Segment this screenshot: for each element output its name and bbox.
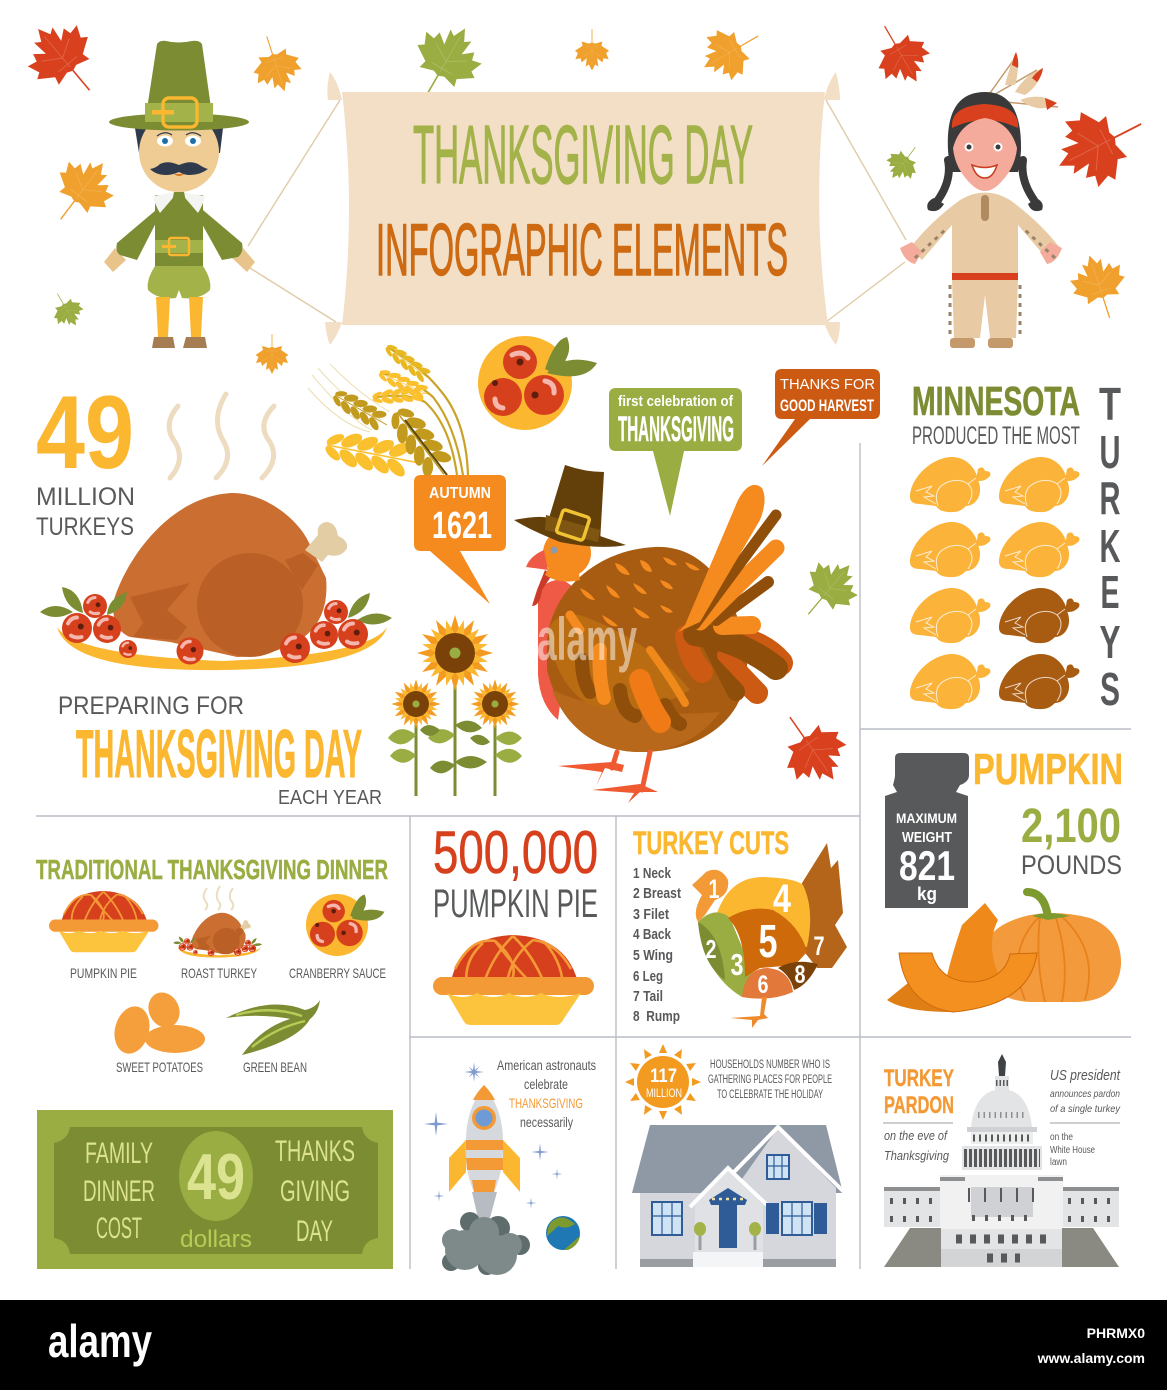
panel: turkey pardon: on the <box>1050 1132 1073 1143</box>
diagram: turkey <box>692 843 847 1028</box>
text: households: GATHERING PLACES FOR PEOPLE <box>708 1074 832 1086</box>
native american girl <box>900 52 1062 348</box>
icon: green beans <box>226 1000 320 1055</box>
panel: family dinner cost banknote: 49 <box>187 1140 245 1213</box>
panel: turkey pardon <box>883 1054 1121 1267</box>
text: households <box>708 1059 832 1101</box>
pilgrim man <box>104 41 255 348</box>
icon: pumpkin <box>887 892 1121 1012</box>
panel: traditional dinner: CRANBERRY SAUCE <box>289 965 386 981</box>
icon: roast turkey on plate <box>40 493 392 670</box>
icon: steam <box>169 394 274 478</box>
stock footer band: alamy <box>48 1315 152 1367</box>
cuts list: 6 Leg <box>633 968 663 985</box>
heading: preparing for thanksgiving day: EACH YEAR <box>278 787 382 809</box>
panel: turkey pardon: White House <box>1050 1145 1095 1156</box>
icon: weight: kg <box>917 884 937 904</box>
cuts list: 3 Filet <box>633 906 669 923</box>
text: THANKSGIVING DAY <box>76 716 362 792</box>
section dividers <box>36 443 1131 1269</box>
callout: first celebration <box>609 388 742 516</box>
panel: family dinner cost banknote: COST <box>96 1212 142 1245</box>
panel: turkey pardon: Thanksgiving <box>884 1148 950 1163</box>
stat: 49 million turkeys: 49 <box>36 375 134 491</box>
panel: astronauts <box>424 1057 596 1275</box>
stat: 49 million turkeys: TURKEYS <box>36 513 134 541</box>
panel: traditional dinner <box>36 854 388 1075</box>
panel: family dinner cost banknote: GIVING <box>280 1175 350 1208</box>
icon: sweet potatoes <box>109 987 205 1058</box>
cuts list: 1 Neck <box>633 865 672 882</box>
panel: family dinner cost banknote: DINNER <box>83 1175 155 1208</box>
icon: sunflowers <box>388 615 522 796</box>
vertical text: turkeys <box>1099 378 1121 715</box>
diagram: turkey: 8 <box>794 961 806 989</box>
cuts list: 8 Rump <box>633 1008 680 1025</box>
icon: weight: MAXIMUM <box>896 811 957 826</box>
panel: pumpkin: POUNDS <box>1021 850 1122 880</box>
panel: 500,000 pumpkin pie: 500,000 <box>433 819 598 886</box>
cuts list: 2 Breast <box>633 885 681 902</box>
callout: thanks for good harvest <box>762 369 880 466</box>
diagram: turkey: 7 <box>814 931 824 961</box>
panel: traditional dinner: TRADITIONAL THANKSGIVING DINNER <box>36 854 388 885</box>
panel: family dinner cost banknote: FAMILY <box>85 1137 153 1170</box>
diagram: turkey: 5 <box>758 915 778 967</box>
diagram: turkey: 3 <box>730 947 744 982</box>
vertical text: turkeys: Y <box>1100 616 1120 668</box>
panel: family dinner cost banknote: DAY <box>296 1215 333 1248</box>
icon: weight: 821 <box>899 842 955 889</box>
panel: minnesota turkeys <box>910 378 1121 715</box>
cuts list: 5 Wing <box>633 947 673 964</box>
text: astronauts: THANKSGIVING <box>509 1095 583 1111</box>
panel: family dinner cost banknote: THANKS <box>275 1135 355 1168</box>
icon: sun <box>625 1044 701 1120</box>
panel: households <box>625 1044 845 1267</box>
stock footer band <box>0 1300 1167 1390</box>
autumn leaves <box>13 8 1158 797</box>
icon: pumpkin pie <box>433 935 594 1025</box>
icon: pilgrim turkey <box>514 465 780 803</box>
pictogram: turkey counts <box>910 457 1079 709</box>
panel: family dinner cost banknote: dollars <box>180 1226 252 1253</box>
cuts list: 7 Tail <box>633 988 663 1005</box>
panel: minnesota turkeys: MINNESOTA <box>912 378 1080 424</box>
icon: house <box>632 1125 845 1267</box>
panel: pumpkin <box>885 745 1123 1012</box>
callout: thanks for good harvest: GOOD HARVEST <box>780 396 874 415</box>
title <box>376 108 788 291</box>
watermark: alamy <box>537 606 637 673</box>
stat: 49 million turkeys <box>36 375 135 541</box>
panel: 500,000 pumpkin pie: PUMPKIN PIE <box>433 882 598 926</box>
callout: autumn 1621: 1621 <box>432 505 492 547</box>
panel: turkey pardon: on the eve of <box>884 1128 948 1143</box>
pilgrim hat <box>109 41 249 130</box>
vertical text: turkeys: E <box>1100 566 1120 618</box>
vertical text: turkeys: K <box>1100 520 1120 572</box>
vertical text: turkeys: U <box>1100 426 1120 478</box>
icon: sun: 117 <box>650 1066 677 1087</box>
text: THANKSGIVING <box>618 410 734 449</box>
panel: turkey pardon: lawn <box>1050 1157 1067 1168</box>
icon: sun: MILLION <box>646 1086 682 1100</box>
text: astronauts: necessarily <box>520 1114 573 1130</box>
text: households: TO CELEBRATE THE HOLIDAY <box>717 1089 823 1101</box>
text: astronauts <box>497 1057 596 1130</box>
vertical text: turkeys: S <box>1100 663 1120 715</box>
icon: cranberries <box>478 336 597 430</box>
stock footer band: PHRMX0 <box>1087 1325 1145 1341</box>
icon: pumpkin pie small <box>49 891 158 952</box>
panel: traditional dinner: ROAST TURKEY <box>181 965 257 981</box>
cuts list <box>633 865 681 1025</box>
panel: traditional dinner: GREEN BEAN <box>243 1059 307 1075</box>
panel: turkey pardon: of a single turkey <box>1050 1103 1121 1115</box>
text: astronauts: American astronauts <box>497 1057 596 1073</box>
vertical text: turkeys: T <box>1099 378 1121 430</box>
stat: 49 million turkeys: MILLION <box>36 483 135 511</box>
panel: turkey pardon: US president <box>1050 1067 1121 1084</box>
panel: turkey cuts <box>633 825 847 1028</box>
panel: 500,000 pumpkin pie <box>433 819 598 1025</box>
diagram: turkey: 2 <box>706 934 716 964</box>
heading: preparing for thanksgiving day <box>58 692 382 809</box>
callout: autumn 1621 <box>414 475 506 604</box>
diagram: turkey: 1 <box>708 874 720 904</box>
icon: rocket <box>442 1085 530 1275</box>
callout: autumn 1621: AUTUMN <box>429 485 491 502</box>
icon: roast turkey small <box>173 886 262 958</box>
panel: traditional dinner: PUMPKIN PIE <box>70 965 137 981</box>
stock footer band: www.alamy.com <box>1037 1350 1145 1366</box>
icon: capitol <box>884 1054 1119 1267</box>
diagram: turkey: 4 <box>773 877 792 921</box>
diagram: turkey: 6 <box>758 971 768 999</box>
panel: family dinner cost banknote <box>37 1110 393 1269</box>
pilgrim hat on turkey <box>514 465 626 547</box>
panel: pumpkin: 2,100 <box>1021 800 1121 853</box>
icon: wheat <box>308 339 468 486</box>
vertical text: turkeys: R <box>1100 472 1120 524</box>
text: astronauts: celebrate <box>524 1076 568 1092</box>
icon: weight <box>885 753 969 908</box>
panel: traditional dinner: SWEET POTATOES <box>116 1059 203 1075</box>
icon: earth <box>546 1216 580 1250</box>
callout: thanks for good harvest: THANKS FOR <box>780 376 875 393</box>
icon: cranberry sauce <box>306 894 385 956</box>
icon: weight: WEIGHT <box>902 830 952 846</box>
panel: turkey pardon: announces pardon <box>1050 1088 1120 1100</box>
heading: preparing for thanksgiving day: PREPARING FOR <box>58 692 244 720</box>
panel: turkey cuts: TURKEY CUTS <box>633 825 789 861</box>
panel: turkey pardon: PARDON <box>884 1092 954 1119</box>
cuts list: 4 Back <box>633 926 672 943</box>
panel: turkey pardon: TURKEY <box>884 1065 954 1092</box>
icons: stars <box>424 1061 562 1208</box>
callout: first celebration: first celebration of <box>618 394 733 410</box>
scroll banner <box>248 72 906 345</box>
text: households: HOUSEHOLDS NUMBER WHO IS <box>710 1059 830 1071</box>
